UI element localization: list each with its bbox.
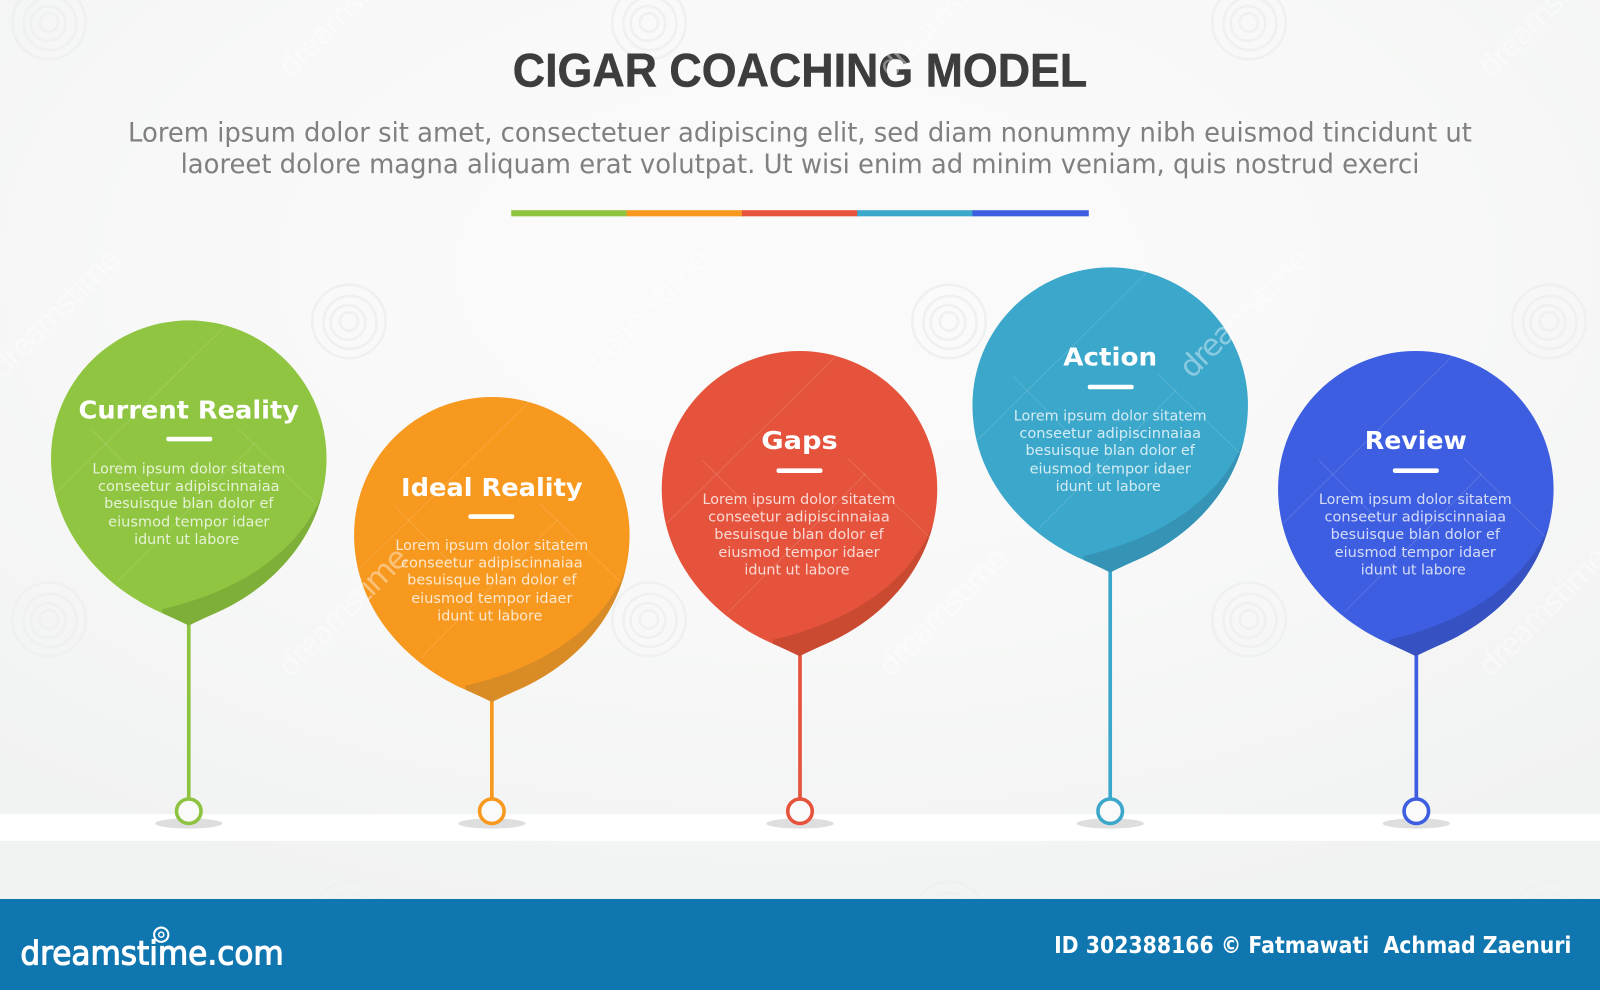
panel: review: Review [1365, 426, 1467, 455]
panel: review: conseetur adipiscinnaiaa [1324, 509, 1506, 525]
panel: gaps: idunt ut labore [744, 562, 850, 578]
panel: ideal reality: Ideal Reality [401, 473, 583, 502]
panel: action [972, 267, 1253, 829]
white ground band [0, 814, 1600, 841]
panel: gaps: eiusmod tempor idaer [718, 545, 880, 561]
watermark text: dreamstime [872, 540, 1016, 684]
footer bar [0, 899, 1600, 990]
panel: gaps: Lorem ipsum dolor sitatem [703, 492, 895, 508]
panel: ideal reality: Lorem ipsum dolor sitatem [395, 538, 588, 554]
panel: current reality: Current Reality [79, 395, 299, 424]
panel: ideal reality: idunt ut labore [437, 608, 543, 624]
panel: review: eiusmod tempor idaer [1335, 545, 1496, 561]
panel: review: besuisque blan dolor ef [1331, 527, 1501, 543]
panel: review: idunt ut labore [1361, 562, 1466, 578]
panel: action: Action [1063, 342, 1157, 371]
panel: review: Lorem ipsum dolor sitatem [1319, 492, 1512, 508]
panel: ideal reality: besuisque blan dolor ef [407, 573, 578, 589]
panel: current reality: eiusmod tempor idaer [108, 515, 270, 531]
panel: ideal reality: eiusmod tempor idaer [411, 591, 573, 607]
panel: gaps: conseetur adipiscinnaiaa [708, 509, 890, 525]
panel: gaps [662, 351, 942, 829]
panel: action: eiusmod tempor idaer [1030, 461, 1191, 477]
watermark text: dreamstime [1173, 241, 1317, 385]
subtitle [128, 117, 1472, 180]
panel: gaps: Gaps [761, 426, 838, 455]
panel: current reality: idunt ut labore [134, 532, 240, 548]
panel: action: conseetur adipiscinnaiaa [1019, 426, 1201, 442]
panel: ideal reality: conseetur adipiscinnaiaa [401, 555, 583, 571]
watermark text [0, 0, 1600, 684]
watermark text: dreamstime [272, 540, 416, 684]
subtitle: laoreet dolore magna aliquam erat volutpat. Ut wisi enim ad minim veniam, quis nostrud exerci [181, 149, 1419, 180]
title: CIGAR COACHING MODEL [513, 45, 1087, 97]
panel: review [1278, 351, 1559, 829]
panel: action: Lorem ipsum dolor sitatem [1014, 408, 1207, 424]
watermark text: dreamstime [573, 241, 717, 385]
panel: action: besuisque blan dolor ef [1026, 443, 1196, 459]
panel: current reality: Lorem ipsum dolor sitatem [92, 461, 285, 477]
subtitle: Lorem ipsum dolor sit amet, consectetuer adipiscing elit, sed diam nonummy nibh euismod tincidunt ut [128, 117, 1472, 148]
panel: action: idunt ut labore [1056, 479, 1161, 495]
panel: current reality: besuisque blan dolor ef [104, 496, 274, 512]
panel: ideal reality [354, 397, 635, 829]
colour divider [511, 210, 1089, 216]
panel: gaps: besuisque blan dolor ef [714, 527, 885, 543]
panel: current reality: conseetur adipiscinnaiaa [98, 479, 280, 495]
footer logo: dreamstime.com [20, 934, 284, 972]
panel: current reality [51, 320, 332, 829]
